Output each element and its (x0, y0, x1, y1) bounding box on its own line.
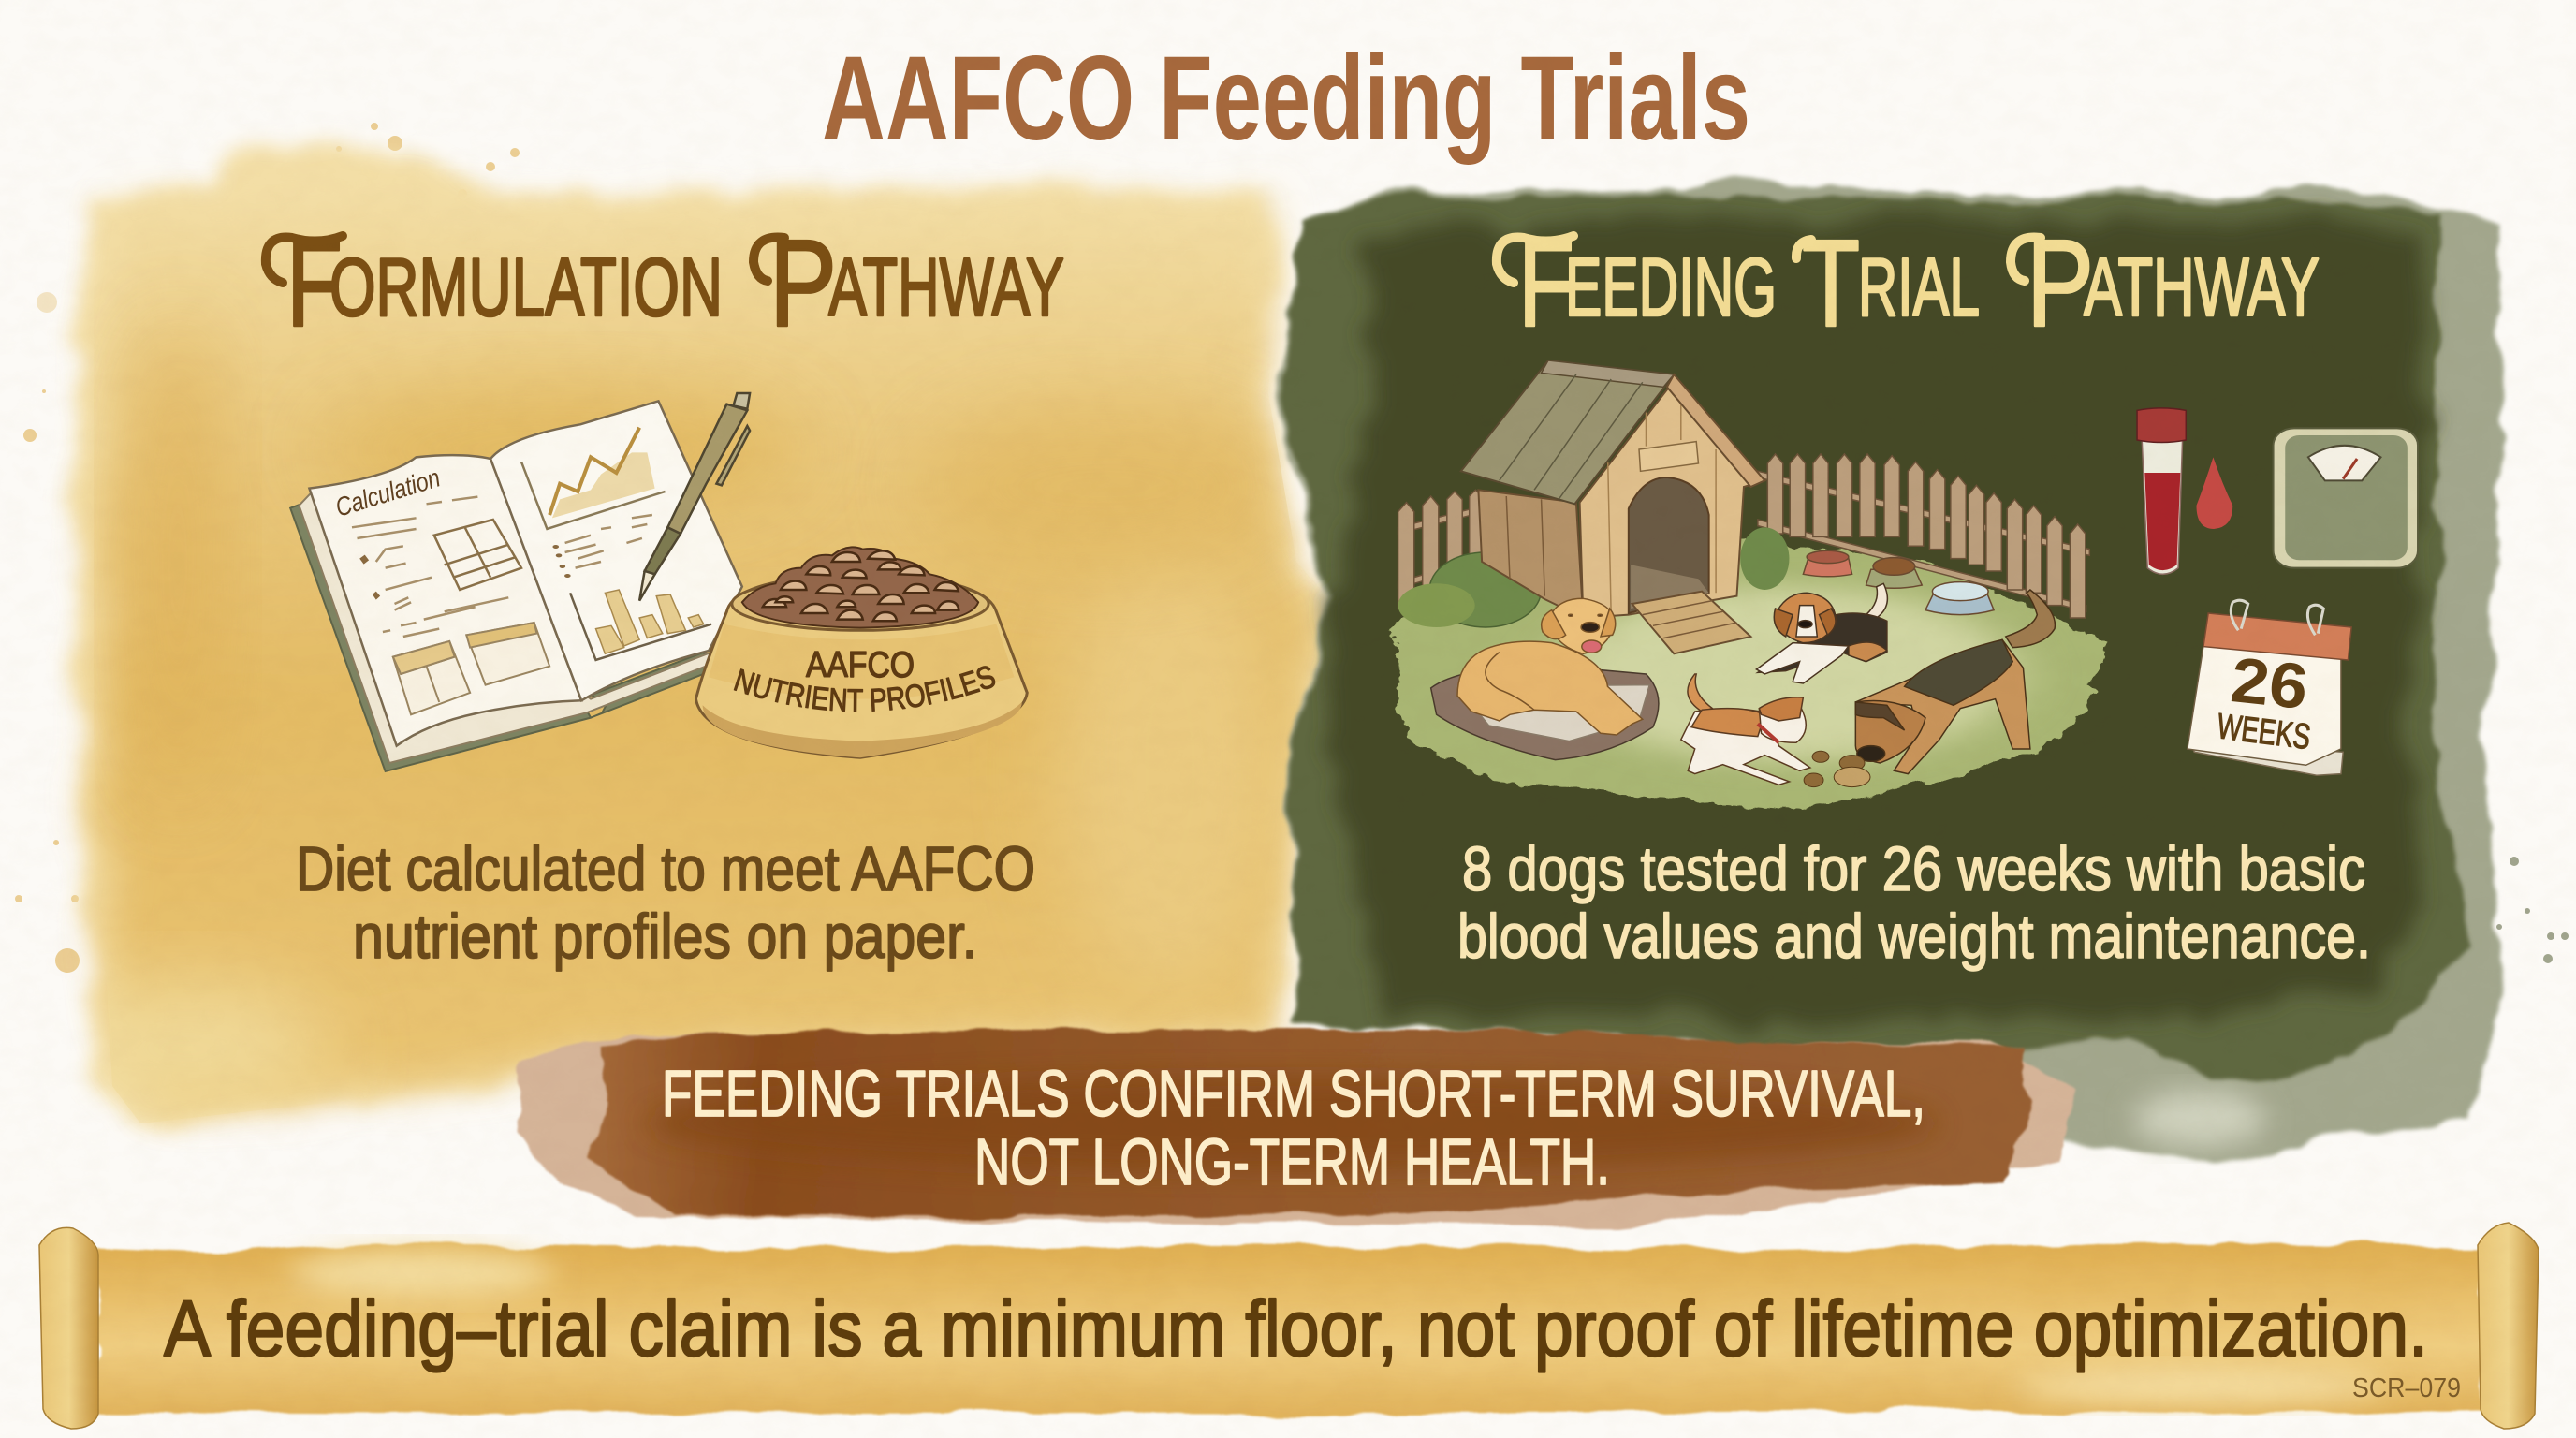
bowl rim (732, 578, 988, 630)
scroll left roller (39, 1227, 98, 1429)
callout darker core (646, 1077, 1938, 1170)
scroll washes (290, 1249, 552, 1298)
heading: formulation pathway: P (769, 214, 837, 352)
panel wash: mid olive (1282, 198, 2466, 1081)
body text: feeding trial: 8 dogs tested for 26 weeks with basic (1462, 834, 2365, 904)
heading: formulation pathway (266, 214, 1064, 352)
body text: formulation: nutrient profiles on paper. (353, 902, 977, 972)
heading: formulation pathway: ATHWAY (828, 241, 1064, 333)
scroll right roller (2478, 1223, 2539, 1429)
right page (490, 401, 742, 700)
kennel (1478, 490, 1583, 618)
icon: open notebook with pen (290, 393, 750, 771)
page scribbles (352, 497, 652, 637)
bar chart (570, 593, 711, 660)
panel wash: pale lower wash (2134, 1091, 2265, 1147)
icon: calendar 26 weeks (2188, 600, 2351, 775)
decorative paint splatter right (2458, 857, 2569, 963)
body text: feeding trial: blood values and weight maintenance. (1457, 902, 2371, 972)
left page (309, 455, 581, 746)
heading: feeding trial pathway (1497, 214, 2320, 352)
small tables (393, 641, 470, 714)
kennel ramp (1632, 592, 1750, 653)
panel wash: dark olive core (1329, 217, 2424, 1022)
scroll code: SCR–079 (2352, 1373, 2461, 1403)
grass (1391, 540, 2107, 810)
heading: feeding trial pathway: ATHWAY (2084, 241, 2320, 333)
icon: kibble bowl (332, 462, 1029, 759)
dog: jack russell (1681, 674, 1810, 785)
icon: blood tube and drop (2137, 408, 2232, 574)
heading: feeding trial pathway: EEDING (1565, 241, 1777, 333)
panel: feeding trial pathway (1278, 178, 2501, 1166)
body text: feeding trial (1457, 834, 2371, 972)
heading: feeding trial pathway: RIAL (1858, 241, 1980, 333)
fence (1398, 454, 2089, 618)
heading: feeding trial pathway: T (1802, 214, 1860, 352)
dog: golden retriever on bed (1431, 598, 1659, 760)
heading: feeding trial pathway: F (1518, 214, 1574, 352)
notebook label: Calculation (332, 462, 444, 522)
book cover (290, 499, 711, 771)
scroll parchment (98, 1243, 2481, 1416)
callout text (662, 1057, 1925, 1198)
panel wash: pale green outer (1278, 178, 2501, 1166)
dog: shepherd (1855, 590, 2055, 774)
panel wash: yellow watercolor (47, 140, 1329, 1128)
bowl label: AAFCO (806, 645, 915, 685)
bullets (359, 545, 571, 600)
line chart (552, 452, 655, 518)
bushes (1429, 552, 1542, 627)
dog: beagle (1756, 583, 1887, 683)
kibble pieces (763, 550, 959, 621)
panel: formulation pathway (54, 130, 1328, 1144)
calendar number: 26 (2228, 644, 2311, 723)
title: AAFCO Feeding Trials (822, 32, 1750, 166)
callout text: NOT LONG-TERM HEALTH. (974, 1125, 1610, 1198)
food and water bowls (1803, 550, 1994, 615)
bowl body (695, 574, 1027, 757)
body text: formulation: Diet calculated to meet AAFCO (296, 834, 1035, 904)
small calculation grid (434, 520, 521, 590)
callout: brown brush banner (515, 1030, 2073, 1226)
heading: feeding trial pathway: P (2027, 214, 2094, 352)
page stack (299, 493, 711, 763)
illustration: dog enclosure (1391, 360, 2107, 810)
heading: formulation pathway: ORMULATION (329, 241, 723, 333)
bowl curved label: NUTRIENT PROFILES (734, 666, 996, 712)
body text: formulation (296, 834, 1035, 972)
icon: weight scale (2274, 428, 2418, 568)
kibble pile (742, 547, 978, 628)
heading: formulation pathway: F (286, 214, 343, 352)
scroll banner (39, 1223, 2539, 1429)
decorative paint splatter left (15, 123, 520, 973)
kibble on grass (1804, 751, 1870, 787)
calendar label: WEEKS (2215, 707, 2313, 757)
callout text: FEEDING TRIALS CONFIRM SHORT-TERM SURVIVAL, (662, 1057, 1925, 1130)
pen (639, 393, 750, 601)
